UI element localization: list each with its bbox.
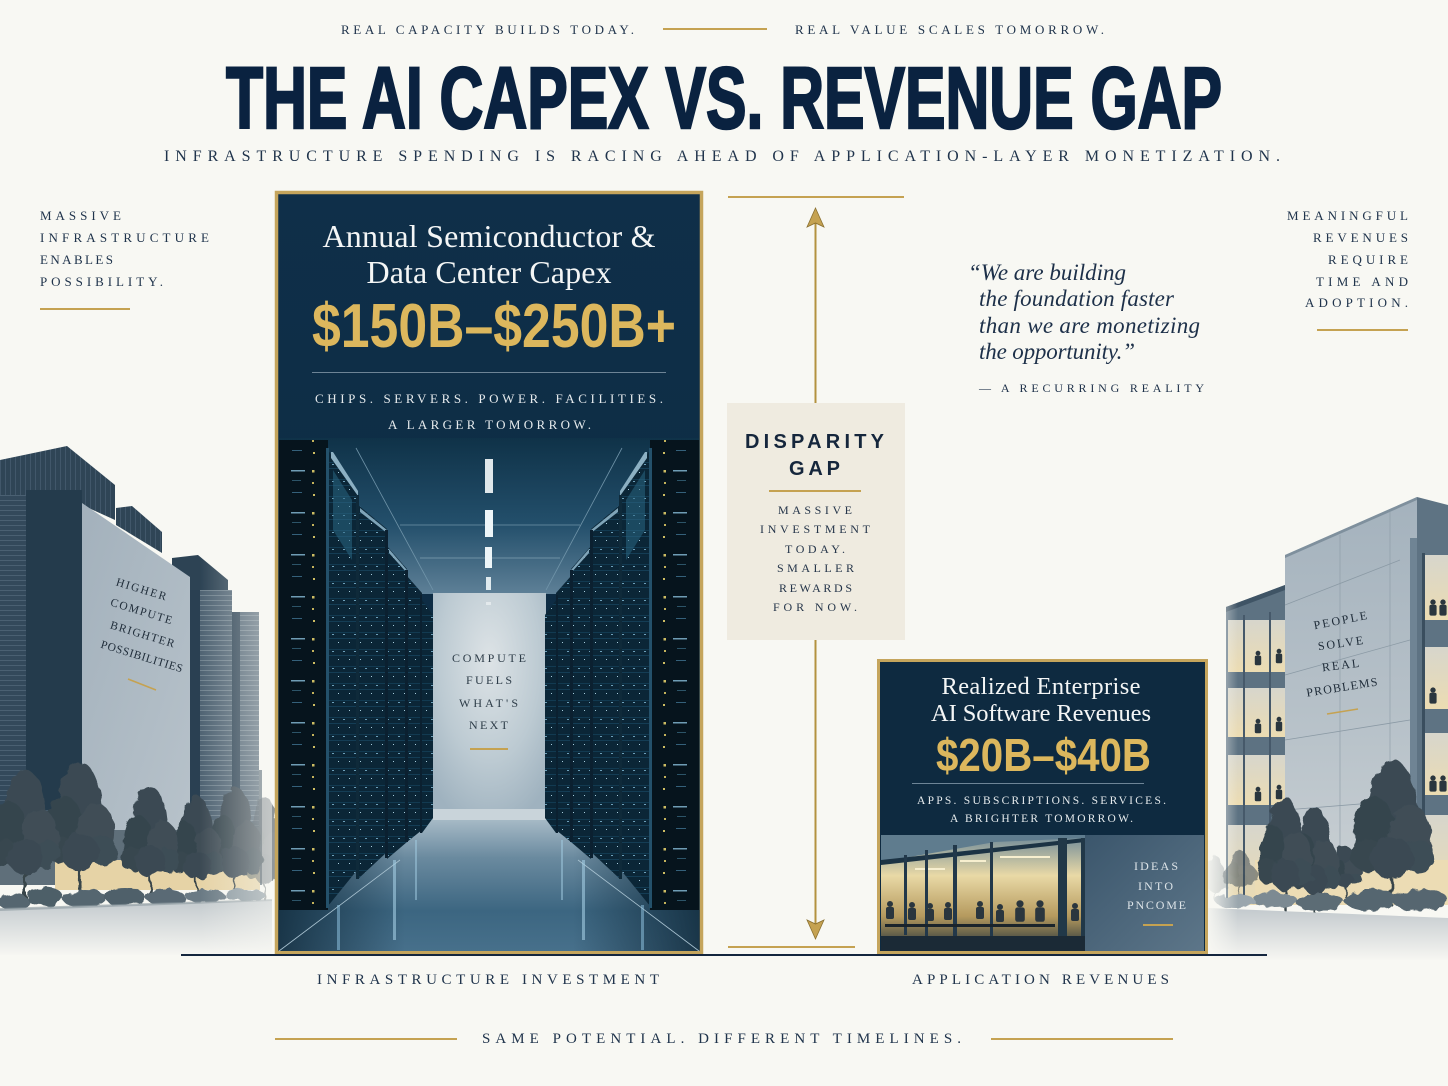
- axis labels: INFRASTRUCTURE INVESTMENT: [317, 972, 659, 988]
- building wall text: higher compute: HIGHER: [114, 577, 169, 604]
- left note: INFRASTRUCTURE: [40, 230, 209, 245]
- left note: POSSIBILITY.: [40, 274, 163, 289]
- quote: — A RECURRING REALITY: [978, 381, 1204, 395]
- building wall text: people solve: SOLVE: [1317, 633, 1366, 653]
- wall text: compute fuels: FUELS: [466, 673, 512, 687]
- left note: ENABLES: [40, 252, 113, 267]
- building wall text: people solve: PROBLEMS: [1305, 674, 1379, 700]
- quote: the opportunity.”: [979, 339, 1135, 364]
- right note: MEANINGFUL: [1287, 208, 1408, 223]
- wall text: compute fuels: NEXT: [469, 718, 509, 732]
- left note: MASSIVE: [40, 208, 121, 223]
- quote: the foundation faster: [979, 286, 1175, 311]
- top tagline: REAL VALUE SCALES TOMORROW.: [795, 22, 1104, 37]
- capex caption: [312, 372, 666, 432]
- disparity gap callout: DISPARITY: [745, 431, 885, 453]
- building wall text: higher compute: BRIGHTER: [109, 619, 177, 651]
- right building illustration: [1201, 430, 1448, 960]
- capex caption: CHIPS. SERVERS. POWER. FACILITIES.: [315, 391, 663, 406]
- right note: [1287, 208, 1408, 331]
- disparity gap callout: TODAY.: [785, 542, 845, 556]
- wall text: ideas into income: [1127, 859, 1186, 926]
- revenue caption: [912, 783, 1166, 825]
- office photo: [881, 835, 1204, 951]
- revenue label: Realized Enterprise: [942, 673, 1141, 700]
- right note: ADOPTION.: [1305, 295, 1408, 310]
- right note: REVENUES: [1313, 230, 1408, 245]
- revenue label: AI Software Revenues: [931, 700, 1151, 727]
- wall text: compute fuels: COMPUTE: [452, 651, 526, 665]
- building wall text: higher compute: [99, 577, 185, 690]
- building wall text: higher compute: COMPUTE: [109, 597, 175, 627]
- axis labels: APPLICATION REVENUES: [912, 972, 1169, 988]
- disparity gap callout: SMALLER: [777, 561, 854, 575]
- quote: than we are monetizing: [979, 313, 1200, 338]
- capex value: $150B–$250B+: [312, 292, 676, 361]
- building wall text: people solve: [1305, 608, 1379, 714]
- wall text: ideas into income: IDEAS: [1134, 859, 1178, 873]
- panel: capex: [276, 192, 702, 952]
- gap arrow: [728, 196, 904, 948]
- capex label: [322, 218, 656, 290]
- quote: “We are building: [968, 260, 1126, 285]
- subtitle: INFRASTRUCTURE SPENDING IS RACING AHEAD OF APPLICATION-LAYER MONETIZATION.: [164, 148, 1280, 165]
- right note: REQUIRE: [1328, 252, 1408, 267]
- capex caption: A LARGER TOMORROW.: [388, 417, 591, 432]
- left building illustration: [0, 440, 286, 960]
- wall text: compute fuels: [452, 651, 526, 750]
- disparity gap callout: GAP: [789, 458, 840, 480]
- building wall text: people solve: REAL: [1321, 656, 1362, 674]
- top tagline: REAL CAPACITY BUILDS TODAY.: [341, 22, 634, 37]
- wall text: ideas into income: PNCOME: [1127, 898, 1186, 912]
- quote: [968, 260, 1204, 395]
- footer line: SAME POTENTIAL. DIFFERENT TIMELINES.: [482, 1031, 961, 1047]
- right note: TIME AND: [1316, 274, 1408, 289]
- wall text: ideas into income: INTO: [1138, 879, 1173, 893]
- panel: revenues: [878, 660, 1206, 952]
- building wall text: people solve: PEOPLE: [1312, 608, 1370, 632]
- revenue caption: A BRIGHTER TOMORROW.: [950, 813, 1133, 825]
- building wall text: higher compute: POSSIBILITIES: [99, 639, 185, 675]
- revenue label: [931, 673, 1151, 727]
- disparity gap callout: INVESTMENT: [760, 522, 871, 536]
- disparity gap callout: MASSIVE: [778, 503, 852, 517]
- axis labels: [317, 972, 1169, 988]
- left note: [40, 208, 209, 310]
- disparity gap callout: REWARDS: [779, 581, 852, 595]
- baseline: [181, 954, 1267, 956]
- revenue value: $20B–$40B: [936, 729, 1151, 781]
- top tagline: [341, 22, 1104, 37]
- capex label: Annual Semiconductor &: [322, 218, 656, 254]
- disparity gap callout: [727, 403, 905, 640]
- disparity gap callout: FOR NOW.: [773, 600, 857, 614]
- data center aisle photo: [279, 438, 699, 951]
- capex label: Data Center Capex: [366, 254, 612, 290]
- revenue caption: APPS. SUBSCRIPTIONS. SERVICES.: [917, 795, 1166, 807]
- wall text: compute fuels: WHAT'S: [459, 696, 518, 710]
